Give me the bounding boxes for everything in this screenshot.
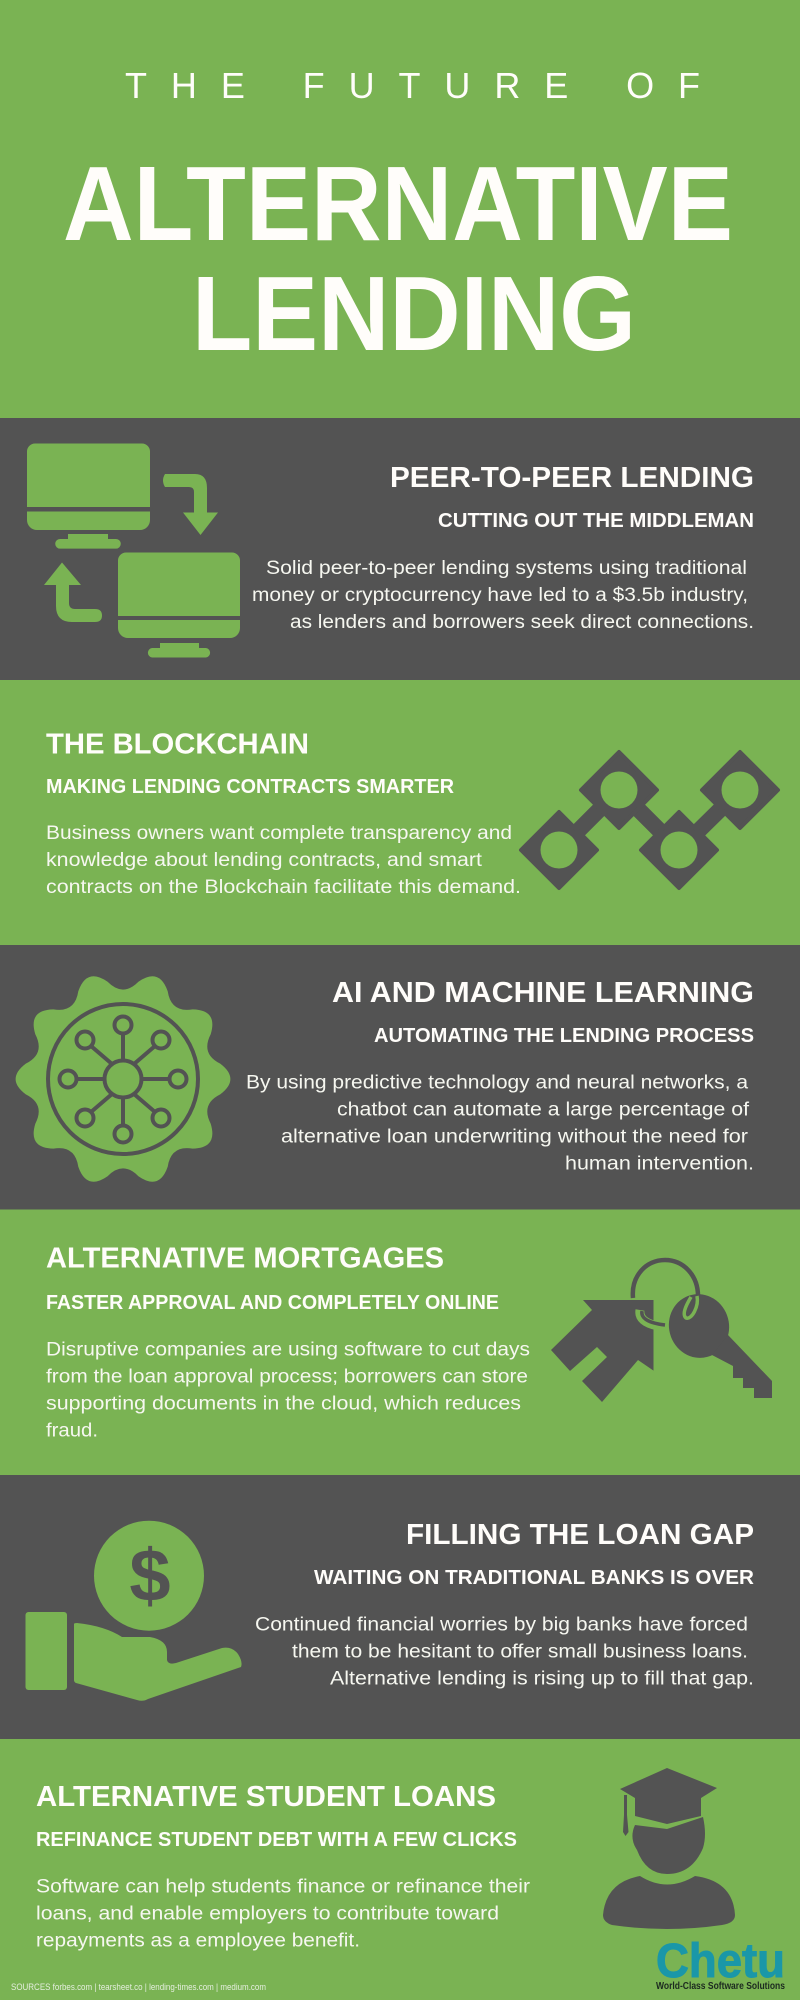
- panel: the blockchain: [0, 680, 800, 945]
- body text: repayments as a employee benefit.: [36, 1930, 360, 1952]
- body text: [36, 1876, 531, 1952]
- icon: blockchain links: [521, 752, 778, 888]
- panel: filling the loan gap: [0, 1475, 800, 1739]
- body text: Software can help students finance or refinance their: [36, 1876, 531, 1898]
- body text: By using predictive technology and neural networks, a: [246, 1072, 748, 1094]
- body text: them to be hesitant to offer small business loans.: [292, 1642, 748, 1662]
- body text: Continued financial worries by big banks have forced: [255, 1614, 748, 1636]
- logo: chetu: Chetu: [656, 1935, 785, 1988]
- icon: hand holding dollar coin: [26, 1521, 242, 1701]
- panel: title header: [0, 0, 800, 418]
- body text: Solid peer-to-peer lending systems using traditional: [266, 558, 747, 579]
- body text: alternative loan underwriting without the need for: [281, 1126, 749, 1148]
- subheading: FASTER APPROVAL AND COMPLETELY ONLINE: [46, 1292, 499, 1314]
- panel: peer-to-peer lending: [0, 418, 800, 680]
- body text: [46, 823, 521, 898]
- body text: knowledge about lending contracts, and smart: [46, 850, 483, 871]
- body text: contracts on the Blockchain facilitate this demand.: [46, 877, 521, 898]
- icon: neural network badge: [16, 976, 230, 1182]
- body text: Disruptive companies are using software to cut days: [46, 1340, 530, 1360]
- icon: house key ring: [551, 1260, 772, 1402]
- subheading: REFINANCE STUDENT DEBT WITH A FEW CLICKS: [36, 1829, 517, 1851]
- title: alternative lending: ALTERNATIVE: [63, 145, 733, 263]
- body text: as lenders and borrowers seek direct connections.: [290, 612, 754, 633]
- heading: ALTERNATIVE STUDENT LOANS: [36, 1781, 496, 1813]
- body text: Business owners want complete transparency and: [46, 823, 512, 844]
- body text: from the loan approval process; borrowers can store: [46, 1366, 528, 1388]
- subheading: MAKING LENDING CONTRACTS SMARTER: [46, 776, 455, 798]
- body text: supporting documents in the cloud, which reduces: [46, 1394, 521, 1414]
- heading: PEER-TO-PEER LENDING: [390, 462, 754, 494]
- body text: fraud.: [46, 1420, 98, 1442]
- heading: ALTERNATIVE MORTGAGES: [46, 1242, 444, 1274]
- subheading: CUTTING OUT THE MIDDLEMAN: [438, 510, 754, 532]
- body text: money or cryptocurrency have led to a $3.5b industry,: [252, 585, 748, 606]
- body text: human intervention.: [565, 1154, 754, 1174]
- body text: Alternative lending is rising up to fill that gap.: [330, 1668, 754, 1690]
- body text: [246, 1072, 754, 1174]
- title: alternative lending: LENDING: [192, 255, 636, 373]
- title: alternative lending: [63, 145, 733, 373]
- body text: chatbot can automate a large percentage of: [337, 1100, 750, 1120]
- panel: alternative student loans: [0, 1739, 800, 2000]
- panel: alternative mortgages: [0, 1210, 800, 1475]
- icon: graduate with cap: [603, 1768, 735, 1929]
- title line: the future of: THE FUTURE OF: [125, 65, 700, 106]
- heading: THE BLOCKCHAIN: [46, 728, 309, 760]
- panel: ai and machine learning: [0, 945, 800, 1210]
- subheading: AUTOMATING THE LENDING PROCESS: [374, 1025, 754, 1047]
- sources line: SOURCES forbes.com | tearsheet.co | lending-times.com | medium.com: [11, 1982, 266, 1993]
- heading: FILLING THE LOAN GAP: [406, 1519, 754, 1551]
- subheading: WAITING ON TRADITIONAL BANKS IS OVER: [314, 1567, 755, 1589]
- body text: [252, 558, 754, 633]
- heading: AI AND MACHINE LEARNING: [332, 977, 754, 1009]
- icon: hand holding dollar coin: $: [129, 1534, 171, 1617]
- body text: loans, and enable employers to contribute toward: [36, 1904, 499, 1924]
- icon: two monitors exchanging arrows: [27, 444, 240, 658]
- body text: [46, 1340, 530, 1442]
- body text: [255, 1614, 754, 1690]
